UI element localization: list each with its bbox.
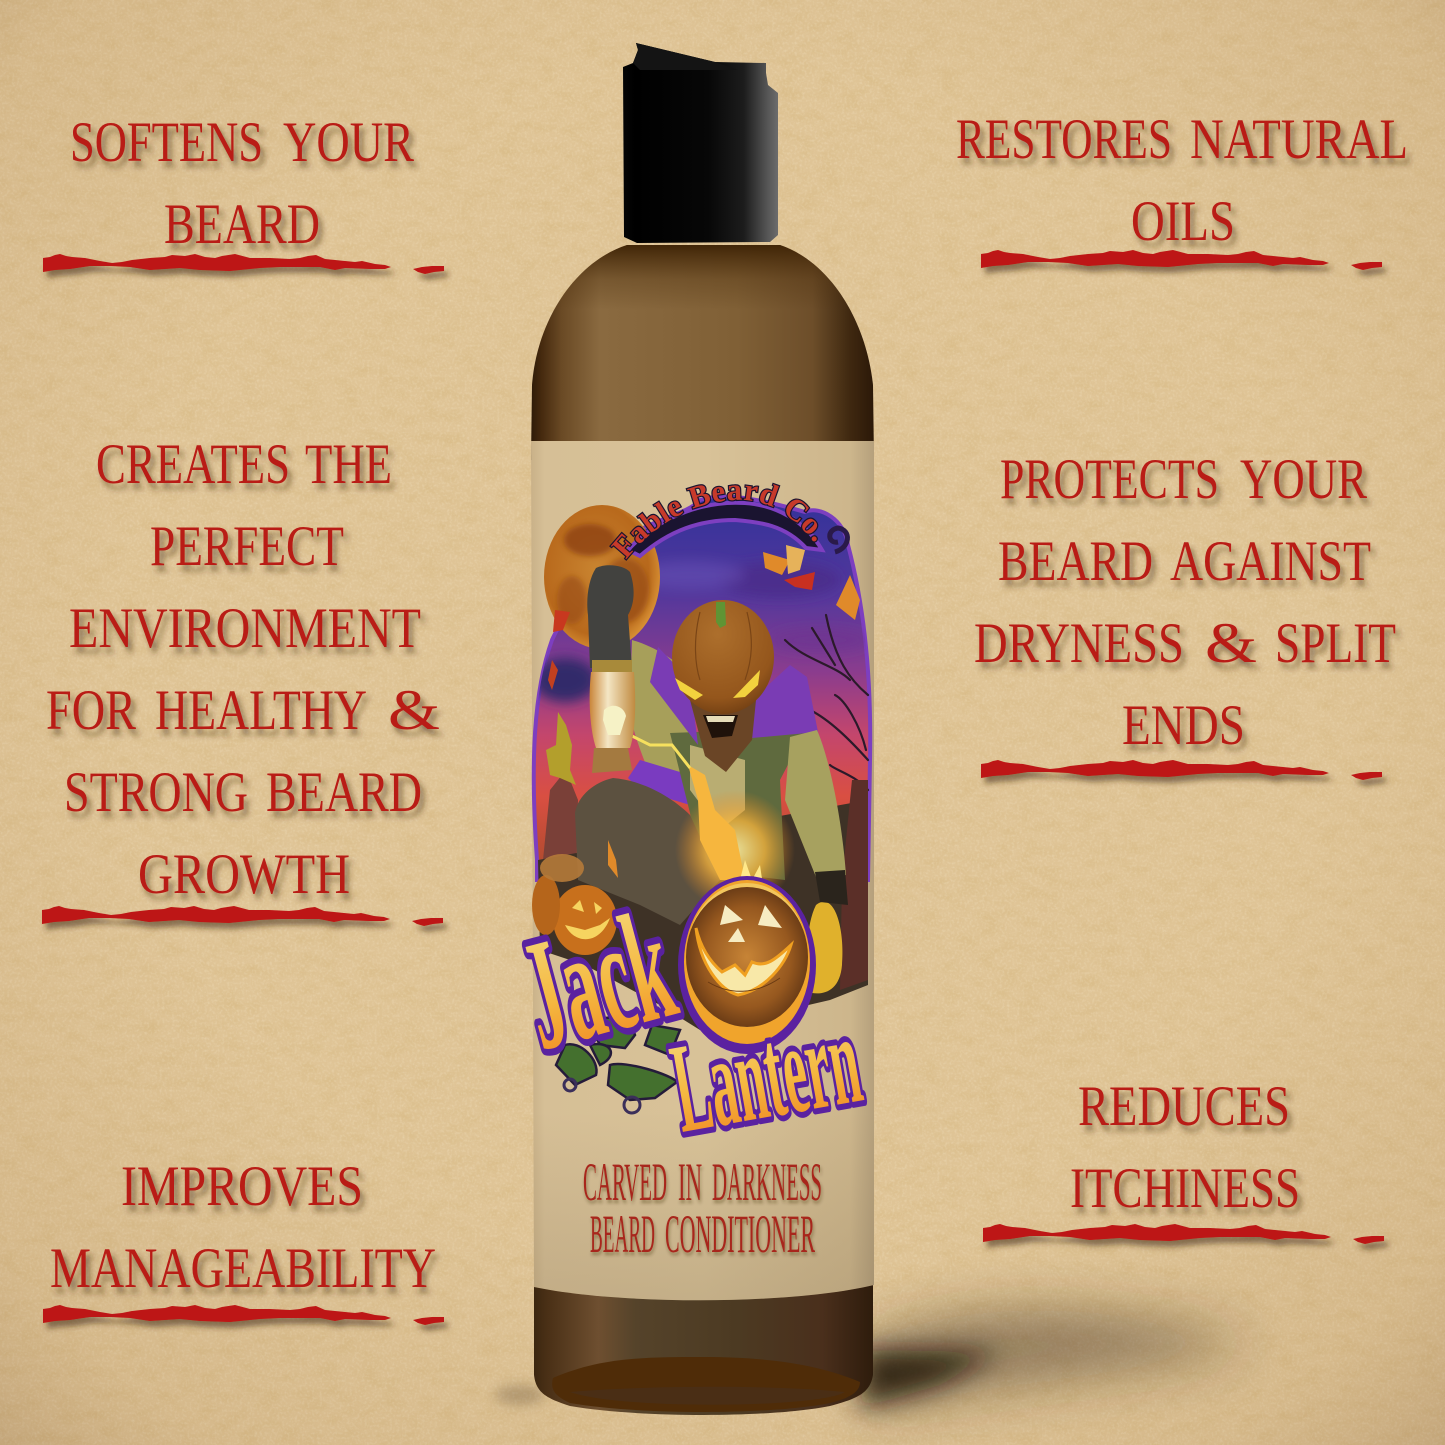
label illustration: right brush bbox=[840, 780, 868, 990]
bottle lower body bbox=[534, 1280, 873, 1415]
benefit: reduces itchiness: ITCHINESS bbox=[1070, 1157, 1300, 1220]
floor shadow of bottle bbox=[495, 1310, 1250, 1410]
benefit: creates the perfect environment: & bbox=[388, 679, 440, 742]
benefit: restores natural oils: OILS bbox=[1131, 190, 1235, 253]
label illustration: sky bbox=[534, 497, 870, 880]
benefit: softens your beard: YOUR bbox=[283, 111, 414, 174]
label illustration: purple sleeve bbox=[628, 760, 690, 805]
label title: Fable Beard Co.: Fable Beard Co. bbox=[609, 482, 818, 561]
label illustration: sleeve bbox=[785, 730, 846, 882]
benefit: reduces itchiness: REDUCES bbox=[1078, 1075, 1290, 1138]
label illustration: flames bbox=[630, 735, 795, 910]
label illustration: vines bbox=[556, 1018, 680, 1113]
benefit: protects your beard bbox=[974, 448, 1396, 780]
label illustration: autumn leaves bbox=[548, 545, 860, 878]
label illustration: cape bbox=[650, 647, 818, 745]
infographic canvas: Lantern bbox=[662, 987, 870, 1160]
benefit: creates the perfect environment: HEALTHY bbox=[155, 679, 367, 742]
benefit: reduces itchiness bbox=[983, 1075, 1384, 1244]
label illustration: vest bbox=[670, 728, 807, 880]
benefit: creates the perfect environment: STRONG bbox=[64, 761, 248, 824]
bottle cap bbox=[623, 43, 778, 243]
benefit: protects your beard: YOUR bbox=[1240, 448, 1367, 511]
label illustration: left trees bbox=[543, 712, 578, 880]
label illustration: moon bbox=[544, 505, 660, 649]
benefit: creates the perfect environment: THE bbox=[305, 433, 392, 496]
label illustration: raised arm bbox=[630, 640, 694, 775]
label illustration: left pumpkins bbox=[532, 854, 617, 955]
label illustration: yellow pumpkin bbox=[807, 870, 848, 993]
label title: Jack: Jack bbox=[505, 877, 690, 1084]
benefit: restores natural oils bbox=[956, 108, 1408, 270]
label product name: IN bbox=[678, 1152, 702, 1212]
benefit: restores natural oils: RESTORES bbox=[956, 108, 1172, 171]
benefit: creates the perfect environment: ENVIRONMENT bbox=[69, 597, 421, 660]
benefit: softens your beard: BEARD bbox=[164, 193, 320, 256]
benefit: improves manageability: MANAGEABILITY bbox=[50, 1237, 436, 1300]
label product name bbox=[583, 1152, 822, 1264]
label product name: CARVED bbox=[583, 1152, 667, 1212]
benefit: creates the perfect environment: FOR bbox=[46, 679, 136, 742]
benefit: protects your beard: BEARD bbox=[998, 530, 1153, 593]
benefit: creates the perfect environment bbox=[42, 433, 443, 926]
label banner behind brand name bbox=[628, 503, 822, 556]
benefit: creates the perfect environment: BEARD bbox=[266, 761, 422, 824]
benefit: softens your beard bbox=[43, 111, 444, 274]
benefit: creates the perfect environment: CREATES bbox=[96, 433, 290, 496]
label swirl bbox=[830, 528, 847, 552]
benefit: protects your beard: SPLIT bbox=[1275, 612, 1396, 675]
label illustration: jack o lantern bbox=[678, 876, 816, 1054]
label illustration: lower dark ground bbox=[538, 800, 868, 1030]
bottle bbox=[505, 43, 874, 1415]
bottle label bbox=[505, 441, 874, 1300]
label product name: BEARD bbox=[590, 1204, 655, 1264]
label illustration: pumpkin head bbox=[672, 600, 774, 738]
benefit: protects your beard: DRYNESS bbox=[974, 612, 1184, 675]
label illustration: lantern bbox=[587, 565, 635, 773]
benefit: protects your beard: AGAINST bbox=[1170, 530, 1371, 593]
benefit: improves manageability bbox=[43, 1155, 444, 1325]
benefit: protects your beard: & bbox=[1205, 612, 1257, 675]
benefit: softens your beard: SOFTENS bbox=[70, 111, 263, 174]
bottle label: DARKNESS bbox=[712, 1152, 822, 1212]
label illustration: beard bbox=[690, 700, 756, 772]
benefit: protects your beard: PROTECTS bbox=[1000, 448, 1219, 511]
benefit: creates the perfect environment: PERFECT bbox=[150, 515, 344, 578]
bottle upper body bbox=[531, 245, 874, 460]
benefit: creates the perfect environment: GROWTH bbox=[138, 843, 350, 906]
label illustration: clouds bbox=[533, 561, 870, 702]
benefit: protects your beard: ENDS bbox=[1122, 694, 1245, 757]
label illustration: knee leg bbox=[575, 778, 720, 925]
label illustration: shirt frill bbox=[690, 745, 745, 830]
label illustration: bare tree bbox=[785, 615, 868, 790]
benefit: improves manageability: IMPROVES bbox=[121, 1155, 363, 1218]
bottle label: CONDITIONER bbox=[665, 1204, 815, 1264]
